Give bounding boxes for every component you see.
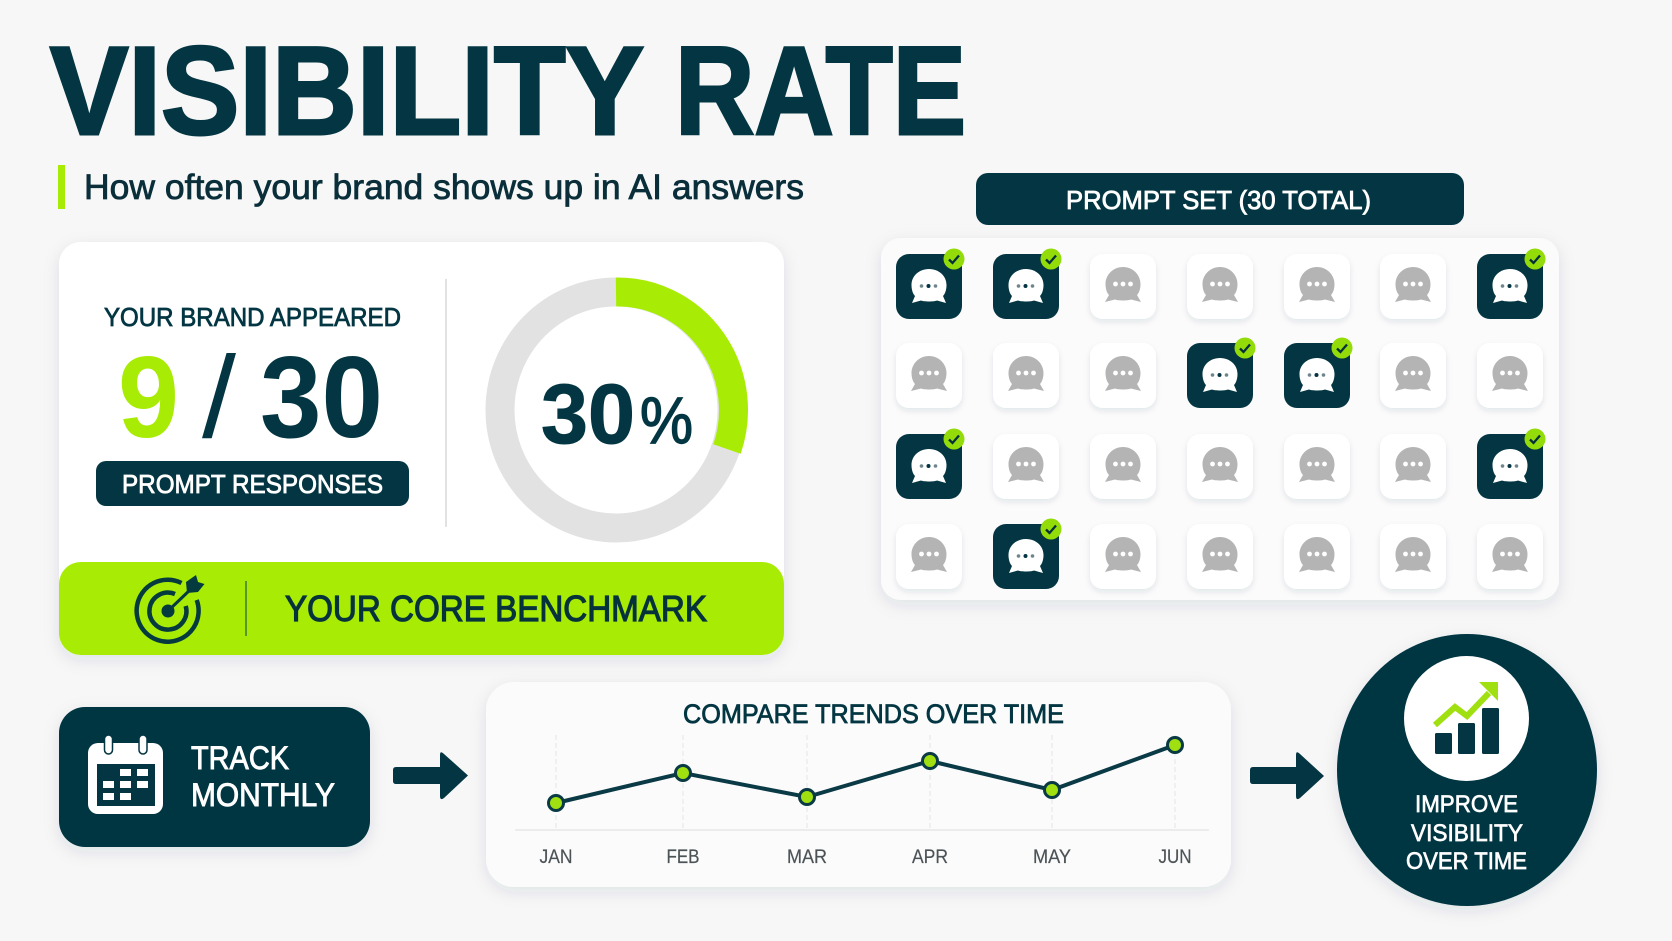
month labels: JUN: [1158, 847, 1192, 868]
label: your brand appeared: YOUR BRAND APPEARED: [104, 302, 401, 332]
panel: brand appearance card: [59, 242, 784, 655]
label: improve visibility over time: IMPROVE: [1415, 791, 1518, 818]
prompt 6: [1380, 254, 1446, 319]
prompt 19: [1284, 434, 1350, 499]
icon: rising bars: [1435, 682, 1499, 754]
icon: calendar: [88, 735, 163, 814]
label: track monthly: [191, 740, 335, 813]
prompt 25: [1187, 524, 1253, 589]
heading: prompt set: PROMPT SET (30 TOTAL): [1066, 185, 1371, 215]
prompt 2 appeared: [993, 248, 1062, 319]
month labels: [540, 847, 1192, 868]
prompt 16: [993, 434, 1059, 499]
subtitle with accent bar: How often your brand shows up in AI answers: [84, 168, 804, 207]
prompt 28: [1477, 524, 1543, 589]
month labels: MAR: [787, 847, 827, 868]
icon: target with dart: [137, 575, 204, 642]
label: track monthly: MONTHLY: [191, 777, 335, 813]
month labels: APR: [912, 847, 948, 868]
label: improve visibility over time: VISIBILITY: [1411, 820, 1523, 847]
pill: prompt responses: PROMPT RESPONSES: [122, 469, 383, 499]
prompt 1 appeared: [896, 248, 964, 319]
line chart: [548, 738, 1182, 810]
prompt 18: [1187, 434, 1253, 499]
month labels: FEB: [666, 847, 700, 868]
prompt 26: [1284, 524, 1350, 589]
label: track monthly: TRACK: [191, 740, 289, 776]
panel: prompt grid: [881, 238, 1559, 600]
panel: trend chart: [486, 682, 1231, 887]
pill: prompt responses: [96, 461, 409, 506]
prompt 11 appeared: [1187, 338, 1256, 408]
prompt 4: [1187, 254, 1253, 319]
donut chart: 30 percent: 30: [541, 367, 635, 461]
prompt 10: [1090, 343, 1156, 408]
stat: 9 of 30: /: [202, 332, 237, 462]
month labels: MAY: [1033, 847, 1071, 868]
prompt 27: [1380, 524, 1446, 589]
label: improve visibility over time: OVER TIME: [1406, 848, 1527, 875]
prompt 22: [896, 524, 962, 589]
prompt 17: [1090, 434, 1156, 499]
stat: 9 of 30: [118, 332, 383, 462]
prompt 13: [1380, 343, 1446, 408]
prompt 15 appeared: [896, 428, 964, 499]
prompt 14: [1477, 343, 1543, 408]
title: [50, 22, 966, 161]
arrow: trends to improve: [1250, 752, 1324, 799]
heading: prompt set: [976, 173, 1464, 225]
banner: core benchmark: YOUR CORE BENCHMARK: [285, 588, 707, 629]
prompt 5: [1284, 254, 1350, 319]
donut chart: 30 percent: %: [640, 383, 693, 457]
badge: improve visibility: [1337, 634, 1597, 906]
panel: track monthly: [59, 707, 370, 847]
month labels: JAN: [540, 847, 572, 868]
prompt 9: [993, 343, 1059, 408]
stat: 9 of 30: 30: [260, 332, 383, 462]
prompt 12 appeared: [1284, 338, 1352, 408]
title: RATE: [675, 22, 966, 161]
prompt 23 appeared: [993, 518, 1062, 589]
prompt 21 appeared: [1477, 428, 1546, 499]
heading: compare trends: COMPARE TRENDS OVER TIME: [683, 699, 1064, 729]
label: improve visibility over time: [1406, 791, 1527, 875]
stat: 9 of 30: 9: [118, 332, 179, 462]
prompt 20: [1380, 434, 1446, 499]
prompt 3: [1090, 254, 1156, 319]
prompt 8: [896, 343, 962, 408]
donut chart: 30 percent: [500, 292, 734, 528]
prompt 24: [1090, 524, 1156, 589]
arrow: track to trends: [393, 752, 468, 799]
prompt 7 appeared: [1477, 248, 1546, 319]
banner: core benchmark: [59, 562, 784, 655]
title: VISIBILITY: [50, 22, 644, 161]
